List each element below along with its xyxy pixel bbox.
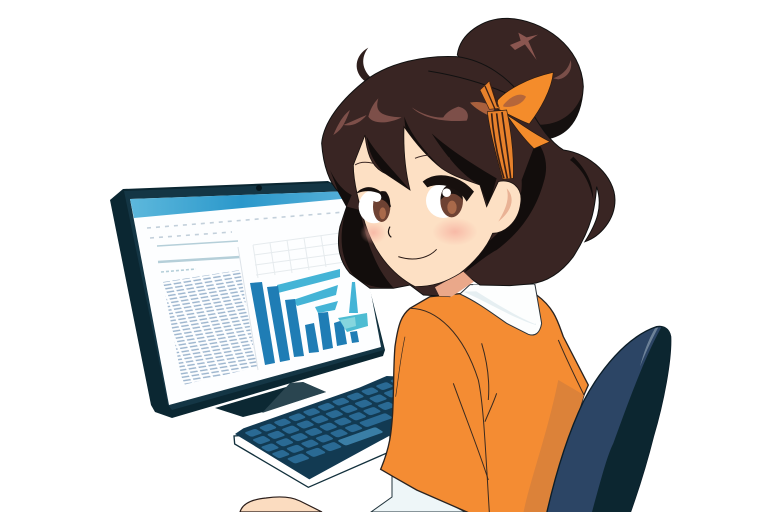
chair back shadow side — [592, 327, 671, 512]
inner ear — [498, 188, 512, 222]
bow tail — [507, 115, 550, 149]
keys — [245, 380, 393, 464]
bar chart — [250, 269, 368, 365]
undershirt sleeve — [371, 476, 465, 512]
chair highlight — [640, 327, 658, 367]
bow striped ribbon — [487, 110, 513, 179]
window title bar — [130, 191, 352, 218]
monitor body — [110, 181, 385, 418]
monitor stand — [215, 382, 326, 417]
keyboard base — [234, 427, 390, 487]
line chart grid — [253, 233, 345, 278]
hair bow — [480, 72, 553, 179]
keyboard body — [235, 376, 400, 479]
toolbar — [147, 212, 345, 238]
chair back — [547, 326, 671, 512]
eye: viewer left — [357, 188, 391, 223]
face and ear — [353, 127, 521, 287]
monitor — [110, 181, 385, 418]
brows — [355, 155, 450, 165]
hair bun — [457, 18, 583, 138]
monitor screen — [130, 190, 381, 405]
chair — [547, 326, 671, 512]
keyboard — [233, 376, 394, 488]
hair back and sides — [322, 56, 615, 297]
head — [322, 18, 615, 297]
blush — [432, 218, 478, 246]
shirt body — [381, 293, 588, 512]
mouth — [398, 249, 437, 259]
hair strand line — [428, 71, 507, 93]
collar — [460, 285, 542, 335]
bow left stripes — [480, 81, 499, 109]
shirt — [381, 285, 588, 512]
hand — [240, 497, 322, 512]
data table — [163, 270, 257, 385]
shirt folds — [396, 308, 584, 512]
hair highlights — [333, 98, 495, 135]
webcam — [256, 185, 262, 191]
spreadsheet heading — [157, 241, 258, 370]
eye: viewer right — [423, 175, 474, 218]
ahoge — [357, 48, 371, 82]
shirt side shadow — [523, 380, 584, 512]
neck — [435, 272, 474, 297]
bow right wing — [497, 72, 553, 124]
hair shadow masses — [330, 117, 593, 288]
nose — [388, 227, 391, 237]
